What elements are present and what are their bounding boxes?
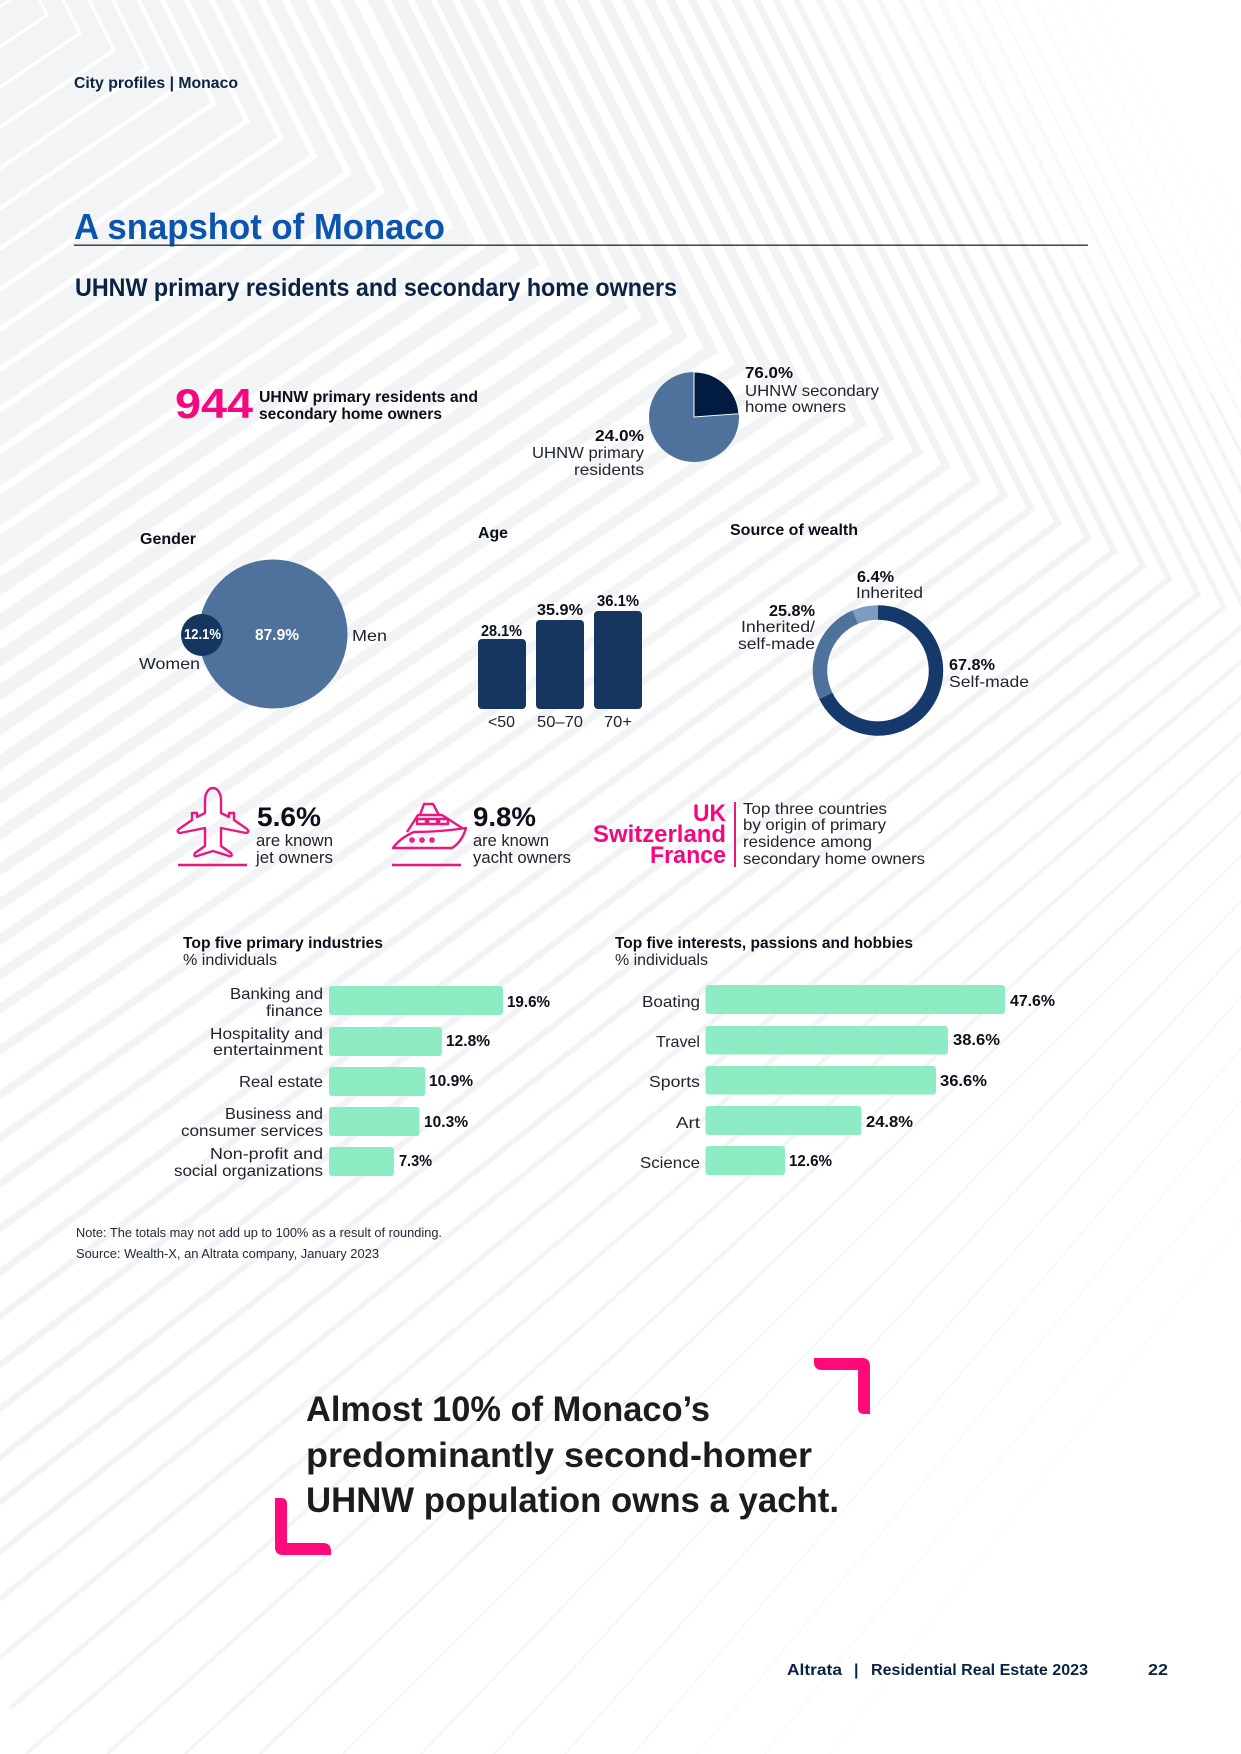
callout quote: Almost 10% of Monaco’s (306, 1390, 710, 1429)
panel: age bar chart: 50–70 (537, 714, 583, 731)
stat: top three countries: residence among (743, 834, 872, 851)
note and source: Source: Wealth-X, an Altrata company, January 2023 (76, 1247, 379, 1261)
stat: 944 UHNW individuals: UHNW primary residents and (259, 389, 478, 406)
stat: 944 UHNW individuals: 944 (175, 380, 254, 427)
stat: top three countries: Switzerland (593, 821, 726, 848)
stat: yacht owners (392, 802, 571, 867)
callout quote (275, 1358, 870, 1555)
pie chart: primary residents vs secondary home owners: 76.0% (745, 365, 793, 382)
stat: yacht owners: 9.8% (473, 802, 536, 832)
panel: gender: 87.9% (255, 627, 299, 644)
footer (787, 1662, 1168, 1679)
bracket: top right (814, 1358, 870, 1414)
pie chart: primary residents vs secondary home owners: UHNW primary (532, 445, 644, 462)
pie chart: primary residents vs secondary home owners: home owners (745, 399, 846, 416)
panel: source of wealth donut: Self-made (949, 674, 1029, 691)
interests bar chart: Science (640, 1155, 700, 1172)
interests heading: % individuals (615, 952, 708, 969)
note and source: Note: The totals may not add up to 100% as a result of rounding. (76, 1226, 442, 1240)
industries bar chart: entertainment (213, 1042, 324, 1059)
panel: source of wealth donut: Inherited/ (741, 619, 816, 636)
circle: men (198, 560, 348, 708)
industries bar chart: consumer services (181, 1123, 323, 1140)
interests bar chart: 36.6% (940, 1073, 987, 1090)
stat: yacht owners: yacht owners (473, 849, 571, 867)
footer: Residential Real Estate 2023 (871, 1662, 1088, 1679)
industries bar chart: 10.9% (429, 1073, 473, 1090)
interests bar chart: 47.6% (1010, 993, 1055, 1010)
panel: gender: 12.1% (184, 626, 221, 643)
icon: airplane (178, 788, 248, 865)
pie chart: primary residents vs secondary home owners: UHNW secondary (745, 383, 879, 400)
panel: source of wealth donut (730, 522, 1029, 728)
stat: top three countries: UK (693, 800, 727, 827)
pie chart: primary residents vs secondary home owners: residents (574, 462, 644, 479)
callout quote: predominantly second-homer (306, 1436, 812, 1475)
industries bar chart: Real estate (239, 1074, 323, 1091)
industries bar chart: 12.8% (446, 1033, 490, 1050)
panel: age bar chart: 35.9% (537, 602, 583, 619)
industries bar chart (174, 986, 550, 1180)
panel: age bar chart (478, 525, 642, 731)
interests heading: Top five interests, passions and hobbies (615, 935, 913, 952)
age heading: Age (478, 525, 508, 542)
industries heading: Top five primary industries (183, 935, 383, 952)
footer: | (854, 1662, 858, 1679)
stat: top three countries: France (650, 842, 726, 869)
gender heading: Gender (140, 531, 196, 548)
panel: source of wealth donut: 6.4% (857, 569, 894, 586)
industries bar chart: Business and (225, 1106, 323, 1123)
interests bar chart: Art (676, 1115, 701, 1132)
stat: yacht owners: are known (473, 832, 549, 850)
interests bar chart (640, 985, 1055, 1175)
interests bar chart: 38.6% (953, 1032, 1000, 1049)
callout quote: UHNW population owns a yacht. (306, 1481, 839, 1520)
industries bar chart: Hospitality and (210, 1026, 323, 1043)
panel: age bar chart: 28.1% (481, 623, 522, 640)
panel: source of wealth donut: Inherited (856, 585, 923, 602)
industries bar chart: Non-profit and (210, 1146, 323, 1163)
panel: source of wealth donut: 67.8% (949, 657, 995, 674)
industries bar chart: Banking and (230, 986, 323, 1003)
industries bar chart: 19.6% (507, 994, 550, 1011)
interests bar chart: Sports (649, 1074, 700, 1091)
panel: gender (139, 531, 387, 708)
footer: 22 (1148, 1662, 1168, 1679)
stat: top three countries: by origin of primary (743, 817, 886, 834)
section subtitle: UHNW primary residents and secondary home owners (75, 274, 677, 302)
title rule (74, 244, 1088, 246)
title: A snapshot of Monaco (74, 206, 445, 247)
pie chart: primary residents vs secondary home owners (532, 365, 879, 479)
stat: jet owners (178, 788, 333, 867)
panel: source of wealth donut: 25.8% (769, 603, 815, 620)
icon: yacht (392, 804, 466, 865)
interests bar chart: 24.8% (866, 1114, 913, 1131)
footer: Altrata (787, 1662, 842, 1679)
industries bar chart: finance (266, 1003, 323, 1020)
stat: top three countries: Top three countries (743, 801, 887, 818)
page header: City profiles | Monaco: City profiles | Monaco (74, 75, 238, 92)
bracket: bottom left (275, 1498, 331, 1555)
stat: top three countries: secondary home owners (743, 851, 925, 868)
interests heading (615, 935, 913, 969)
stat: jet owners: jet owners (255, 849, 333, 867)
industries bar chart: 10.3% (424, 1114, 468, 1131)
industries bar chart: 7.3% (399, 1153, 432, 1170)
interests bar chart: Boating (642, 994, 700, 1011)
industries heading: % individuals (183, 952, 277, 969)
panel: top five interests, passions and hobbies (615, 935, 1055, 1175)
source of wealth heading: Source of wealth (730, 522, 858, 539)
panel: age bar chart: <50 (488, 714, 515, 731)
panel: source of wealth donut: self-made (738, 636, 815, 653)
industries bar chart: social organizations (174, 1163, 323, 1180)
stat: top three countries (593, 800, 925, 869)
interests bar chart: 12.6% (789, 1153, 832, 1170)
stat: 944 UHNW individuals (175, 380, 478, 427)
panel: gender: Women (139, 656, 200, 673)
interests bar chart: Travel (656, 1034, 700, 1051)
note and source (76, 1226, 442, 1261)
panel: age bar chart: 36.1% (597, 593, 639, 610)
pie chart: primary residents vs secondary home owners: 24.0% (595, 428, 644, 445)
panel: top five primary industries (174, 935, 550, 1180)
stat: jet owners: are known (256, 832, 333, 850)
panel: gender: Men (352, 628, 387, 645)
circle: women (181, 614, 223, 656)
stat: jet owners: 5.6% (257, 802, 321, 832)
industries heading (183, 935, 383, 969)
stat: 944 UHNW individuals: secondary home owners (259, 406, 442, 423)
panel: age bar chart: 70+ (604, 714, 632, 731)
